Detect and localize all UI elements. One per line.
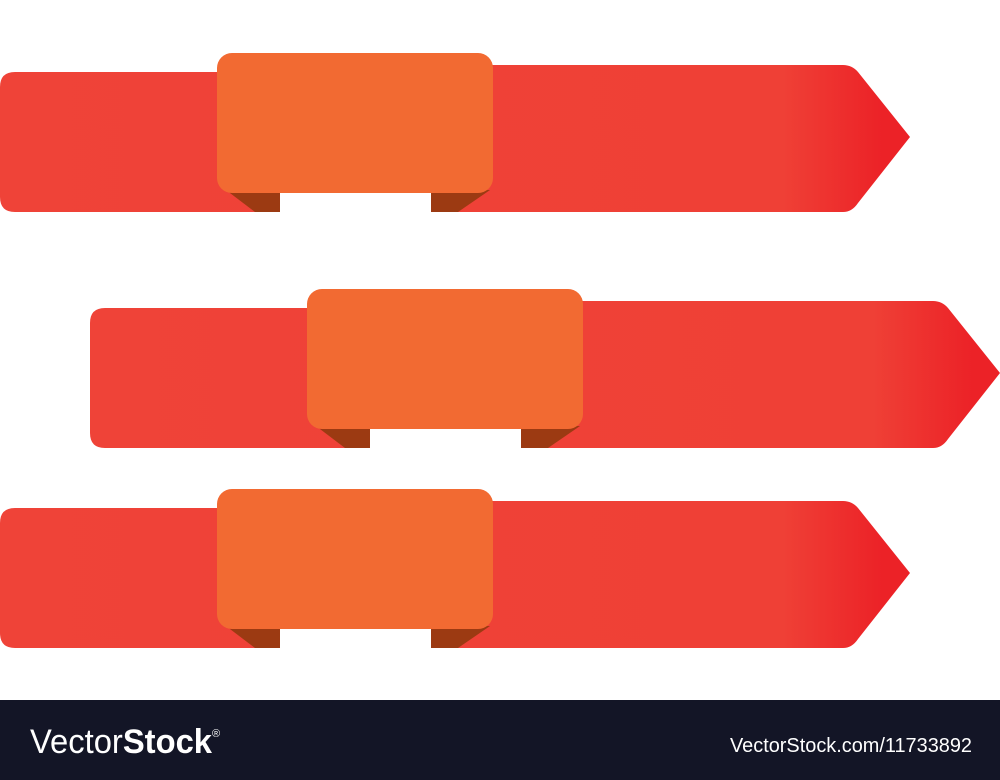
arrow band 1 — [0, 65, 910, 212]
fold left 2 — [316, 426, 370, 448]
arrow band 2 — [90, 301, 1000, 448]
footer logo: ® — [212, 728, 220, 740]
banner 3 — [0, 489, 910, 650]
fold left 3 — [226, 626, 280, 648]
label tab 2 — [307, 289, 583, 429]
footer url: VectorStock.com/11733892 — [730, 735, 972, 757]
banner 1 — [0, 53, 910, 214]
banner 2 — [90, 289, 1000, 450]
footer logo: VectorStock — [30, 723, 212, 761]
footer bar — [0, 700, 1000, 780]
arrow band 3 — [0, 501, 910, 648]
label tab 1 — [217, 53, 493, 193]
fold right 2 — [521, 426, 580, 448]
fold left 1 — [226, 190, 280, 212]
label tab 3 — [217, 489, 493, 629]
fold right 1 — [431, 190, 490, 212]
fold right 3 — [431, 626, 490, 648]
